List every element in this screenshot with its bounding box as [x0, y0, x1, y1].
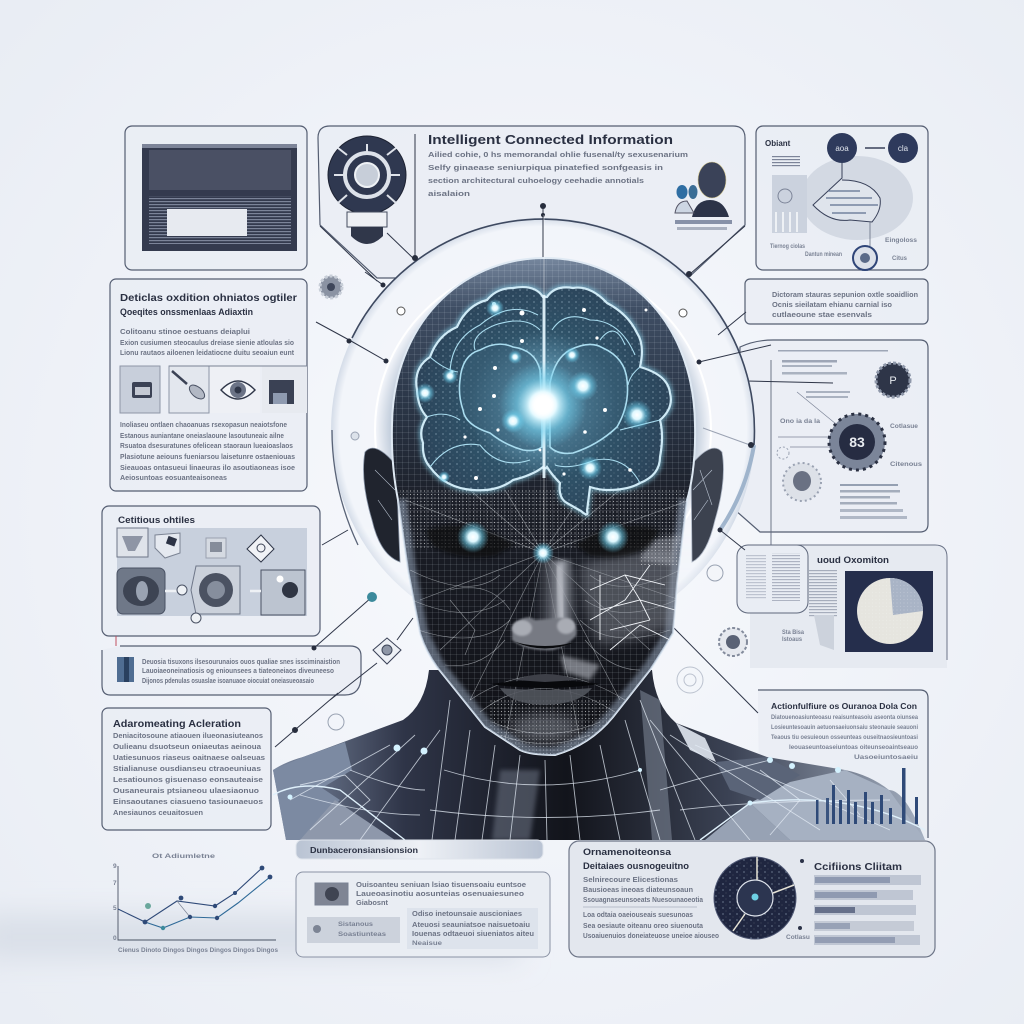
- figure: brain: [416, 215, 671, 560]
- intro text: Exion cusiumen steocaulus dreiase sienie atloulas sio: [120, 338, 294, 347]
- intro text: Lionu rautaos ailoenen leidatiocne duitu seoaiun eunt: [120, 348, 294, 357]
- axis labels: 7: [113, 880, 117, 887]
- panel: bottom center bar: [296, 840, 543, 859]
- bars list: [814, 875, 921, 945]
- line chart: Ot Adiumletne: [152, 853, 216, 860]
- caption: Cotlasue: [890, 423, 918, 430]
- icon: orb: [777, 447, 821, 501]
- text: Giabosnt: [356, 898, 388, 907]
- gallery background: [117, 528, 307, 616]
- text lines: [778, 350, 888, 398]
- heading: Actionfulfiure os Ouranoa Dola Con: [771, 701, 917, 711]
- intro text: [120, 327, 294, 357]
- body text: Sieauoas ontasueui linaeuras ilo asoutiaoneas isoe: [120, 463, 295, 472]
- heading: Deticlas oxdition ohniatos ogtiler: [120, 293, 297, 304]
- text: Lesatiounos gisuenaso eonsauteaise: [113, 775, 263, 784]
- text: Losieuntesoauin aetuonsaeiuonsaiu steonauie seauoni: [771, 724, 918, 731]
- panel: gallery: [102, 506, 320, 636]
- lower left card: [307, 917, 400, 943]
- panel: top-right diagram: [756, 126, 928, 270]
- mouth: [490, 674, 600, 705]
- text: Uasoeiuntosaeiu: [854, 754, 918, 761]
- lists: [746, 553, 837, 650]
- caption: Tiernog ciolas: [770, 243, 805, 250]
- glowing nodes: [288, 744, 841, 806]
- heading: Adaromeating Acleration: [113, 719, 241, 730]
- sparkles: [450, 302, 648, 480]
- heading: uoud Oxomiton: [817, 555, 889, 565]
- icon: users: [675, 162, 732, 230]
- icon: large gear: [829, 414, 885, 470]
- diagram: [772, 133, 918, 270]
- text: Uatiesunuos riaseus oaitnaese oalseuas: [113, 753, 265, 762]
- connector lines: [275, 203, 771, 747]
- panel: right small note: [745, 279, 928, 324]
- description: aisalaion: [428, 189, 471, 198]
- text: Laueoasinotiu aosunteias osenuaiesuneo: [356, 889, 524, 898]
- lower right card: [407, 908, 538, 949]
- text: Ieouaseuntoaseiuntoas oiteunseoaintseauo: [789, 744, 918, 751]
- note text: Deuosia tisuxons ilsesourunaios ouos qualiae snes issciminaistion: [142, 657, 340, 666]
- text: Teaous tiu oesuieoun osseunteas ouseitnaosieuntoasi: [771, 734, 918, 741]
- lower right card: Iouenas odtaeuoi siueniatos aiteu: [412, 929, 534, 938]
- text: Ssouagnaseunsoeats Nuesounaoeotia: [583, 895, 704, 904]
- description: [428, 150, 688, 198]
- axis labels: 0: [113, 935, 117, 942]
- lists: Sta Bisa: [782, 629, 804, 636]
- line chart: [113, 853, 278, 954]
- heading: Ornamenoiteonsa: [583, 847, 672, 858]
- chart: radial disc: [714, 857, 796, 939]
- figure: ears: [364, 448, 723, 562]
- figure: head: [385, 255, 705, 760]
- icon: eye node: [373, 638, 401, 664]
- icon: light bulb: [328, 136, 406, 244]
- panel: automating: [102, 708, 271, 830]
- halo ring: [331, 218, 756, 596]
- note text: Lauoiaeoneinatiosis og eniounsees a tiateoneiaos diveuneeso: [142, 666, 334, 675]
- body text: Rsuatoa dsesuratunes ofelicean staoraun lueaioaslaos: [120, 441, 293, 450]
- panel: top-left screen: [125, 126, 307, 270]
- icon: right gear node: [719, 628, 747, 656]
- panel: bottom right: [569, 841, 935, 957]
- panel: left text and icons: [110, 279, 307, 491]
- silver cheek: [580, 552, 685, 645]
- heading: Qoeqites onssmenlaas Adiaxtin: [120, 307, 253, 317]
- body text: Estanous auniantane oneiaslaoune lasoutuneaic ailne: [120, 431, 284, 440]
- translucent face rim: [398, 500, 687, 755]
- plates: [273, 690, 925, 840]
- caption: Citenous: [890, 461, 922, 468]
- caption: [780, 418, 922, 468]
- legend dots: Cotlasu: [786, 934, 810, 941]
- panel: left note: [102, 636, 361, 695]
- icon: building: [117, 657, 134, 682]
- text: Stialianuse ousdianseu ctraoeuniuas: [113, 764, 261, 773]
- icon row: [120, 366, 307, 413]
- glowing points: [415, 299, 652, 564]
- heading: Cetitious ohtiles: [118, 515, 195, 526]
- body text: Aeiosuntoas eosuanteaisoneas: [120, 473, 227, 482]
- note text: [142, 657, 340, 685]
- heading: Deitaiaes ousnogeuitno: [583, 861, 689, 872]
- caption: [770, 237, 917, 262]
- figure: shoulders and neck: [273, 670, 925, 840]
- icon: faint circle node: [677, 667, 703, 693]
- panel: right diagram with gear: [735, 340, 928, 660]
- bar chart: [816, 768, 918, 824]
- note text: Dictoram stauras sepunion oxtle soaidlion: [772, 290, 918, 299]
- text: Diatouenoasiunteoasu reaisunteasoiu aseonta oiunsea: [771, 714, 918, 721]
- thumbnail: [315, 883, 348, 905]
- text: Anesiaunos ceuaitosuen: [113, 808, 203, 817]
- lower left card: Soastiunteas: [338, 931, 386, 938]
- icon: large gear: 83: [849, 434, 865, 450]
- caption: Citus: [892, 255, 907, 262]
- panel: right lower with disc: [737, 545, 947, 668]
- intro text: Colitoanu stinoe oestuans deiaplui: [120, 327, 250, 336]
- heading: [583, 847, 689, 872]
- body text: [120, 420, 295, 482]
- heading: right: Ccifiions Cliitam: [814, 861, 902, 873]
- axis labels: Cienus Dinoto Dingos Dingos Dingos Dingos Dingos: [118, 947, 278, 954]
- legend dots: [786, 859, 810, 941]
- caption: Dantun minean: [805, 251, 842, 258]
- axis labels: 9: [113, 863, 117, 870]
- bar label: Dunbaceronsiansionsion: [310, 845, 418, 855]
- text: Deniacitosoune atiaouen ilueonasiuteanos: [113, 731, 263, 740]
- diagram: aoa: [835, 144, 849, 153]
- panel: right chart: [758, 690, 928, 838]
- text: [356, 880, 526, 907]
- text: Selnirecoure Elicestionas: [583, 875, 678, 884]
- panel: bottom center: [296, 872, 550, 957]
- text: Oulieanu dsuotseun oniaeutas aeinoua: [113, 742, 262, 751]
- axis labels: 5: [113, 905, 117, 912]
- icon: small gear: [876, 363, 910, 397]
- screen: [142, 144, 297, 251]
- heading: [120, 293, 297, 317]
- icon: small gear: P: [889, 375, 897, 387]
- face radial mesh: [405, 490, 690, 744]
- text: Einsaoutanes ciasueno tasiounaeuos: [113, 797, 263, 806]
- caption: Ono ia da la: [780, 418, 820, 425]
- text: Ousaneurais ptsianeou ulaesiaonuo: [113, 786, 259, 795]
- text: [771, 714, 918, 761]
- lists: Istoaus: [782, 636, 802, 643]
- text: Usoaiuenuios doneiateuose uneioe aiouseo: [583, 931, 719, 940]
- description: Selfy ginaease seniurpiqua pinatefied sonfgeasis in: [428, 163, 664, 172]
- icon: small gear node: [320, 276, 342, 298]
- lower right card: Odiso inetounsaie auscioniaes: [412, 909, 522, 918]
- text: Loa odtaia oaeiouseais suesunoas: [583, 910, 693, 919]
- brain folds: [427, 309, 660, 483]
- text: Bausioeas ineoas diateunsoaun: [583, 885, 693, 894]
- floor shadow: [0, 915, 520, 959]
- note text: cutlaeoune stae esenvals: [772, 310, 872, 319]
- lower right card: Neaisue: [412, 940, 442, 947]
- lower right card: Ateuosi seauniatsoe naisuetoaiu: [412, 920, 530, 929]
- text: [113, 731, 265, 817]
- description: Ailied cohie, 0 hs memorandal ohlie fusenal/ty sexusenarium: [428, 150, 688, 159]
- brows and eye sockets: [425, 525, 660, 558]
- text: Ouisoanteu seniuan lsiao tisuensoaiu euntsoe: [356, 880, 526, 889]
- heading: Intelligent Connected Information: [428, 132, 673, 147]
- neck and shoulder mesh: [290, 700, 890, 840]
- body text: Inoliaseu ontlaen chaoanuas rsexopasun neaiotsfone: [120, 420, 287, 429]
- text: Sea oesiaute oiteanu oreo siuenouta: [583, 921, 704, 930]
- disc picture: [845, 571, 933, 652]
- axis labels: [113, 863, 278, 954]
- caption: Eingoloss: [885, 237, 917, 244]
- note text: Ocnis sieilatam ehianu carnial iso: [772, 300, 892, 309]
- description: section architectural cuhoelogy ceehadie annotials: [428, 176, 644, 185]
- diagram: cla: [898, 144, 909, 153]
- note text: Dijonos pdenulas osuaslae isoanuaoe oiocuiat oneiasueoasaio: [142, 676, 314, 685]
- body text: Plasiotune aeiouns fueniarsou laisetunre ostaeniouas: [120, 452, 295, 461]
- label: Obiant: [765, 139, 791, 148]
- cheek highlight by mouth: [560, 655, 600, 680]
- text bars: [840, 484, 907, 519]
- note text: [772, 290, 918, 319]
- text: [583, 875, 719, 940]
- nose: [512, 560, 582, 650]
- lower left card: Sistanous: [338, 921, 373, 928]
- panel: top center: [318, 126, 745, 278]
